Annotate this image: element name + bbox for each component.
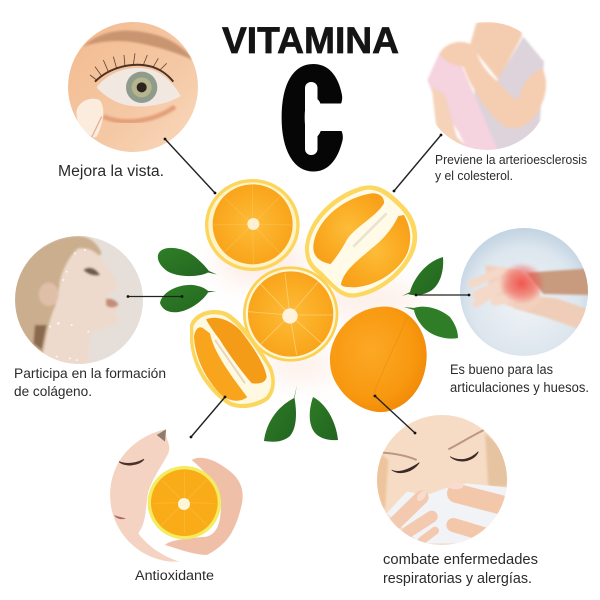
photo: shoulder pain circle: [426, 22, 548, 150]
label: arterioesclerosis: y el colesterol.: [435, 169, 513, 183]
left eyebrow: [382, 453, 417, 460]
orange half: top right: [305, 185, 417, 298]
lips: [106, 299, 118, 307]
label: articulaciones: articulaciones y huesos.: [450, 380, 589, 395]
hair wisp: [157, 429, 166, 442]
photo: antioxidant circle: [110, 429, 243, 562]
leaves group: [158, 248, 458, 442]
left arm: [431, 87, 468, 147]
label: respiratorias: combate enfermedades: [383, 552, 538, 568]
t-shirt left: [427, 52, 500, 155]
orange wedge: lower left: [190, 310, 275, 408]
orange slice: center: [243, 266, 338, 362]
connector: eye to orange: [164, 138, 216, 194]
label: arterioesclerosis: [435, 153, 587, 183]
eye: [83, 268, 100, 276]
dark hair shadow by the neck: [33, 325, 47, 350]
skin: face and neck: [40, 248, 119, 365]
leaf: bottom left: [264, 385, 297, 442]
label: articulaciones: Es bueno para las: [450, 362, 553, 377]
crossing arm and hand: [440, 42, 546, 128]
connector: antioxidant to wedge: [190, 396, 226, 438]
tissue: [387, 483, 507, 543]
label: colágeno: Participa en la formación: [14, 365, 166, 381]
eye white: [97, 68, 181, 106]
photo: eye circle: [68, 22, 198, 152]
iris: [126, 72, 157, 103]
right closed eye: [450, 452, 478, 461]
holding hand: [165, 458, 243, 555]
whole orange: [330, 307, 427, 412]
label: arterioesclerosis: Previene la arterioesclerosis: [435, 153, 587, 167]
soft shadows under the fruit: [216, 242, 423, 378]
neck and chest: [470, 22, 522, 80]
leaf: right upper: [402, 257, 443, 296]
ear: [39, 283, 59, 306]
closed eye: [119, 459, 144, 465]
hair: [13, 236, 102, 365]
label: respiratorias: respiratorias y alergías.: [383, 571, 532, 587]
oranges group: [190, 179, 427, 412]
lips: [114, 515, 126, 519]
palm: [485, 265, 542, 312]
title: big letter C: C: [285, 49, 339, 187]
front arm: [514, 296, 586, 329]
right eyebrow: [448, 430, 484, 449]
shaded sides of the face: [373, 433, 510, 510]
pupil: [137, 82, 147, 92]
connector: shoulder to orange: [393, 134, 442, 192]
orange held in hand: [148, 466, 221, 539]
fingers: [472, 270, 525, 304]
label: colágeno: [14, 365, 166, 399]
red inflammation: [499, 263, 544, 304]
title: VITAMINA: VITAMINA: [222, 20, 399, 61]
connector: nose to orange: [374, 395, 416, 434]
photo: sore hand circle: [460, 228, 588, 356]
leaf: left upper: [158, 248, 217, 276]
photo: nose tissue circle: [377, 415, 507, 545]
dotted massage lines: [49, 249, 89, 361]
t-shirt right: [473, 37, 544, 155]
under-eye crease: [103, 107, 175, 121]
label: respiratorias: [383, 552, 538, 587]
fingernails: [415, 483, 463, 503]
label: colágeno: de colágeno.: [14, 383, 92, 399]
connector: hand to leaf: [415, 294, 470, 296]
back arm: [527, 268, 590, 295]
left fingers: [397, 497, 435, 541]
finger: [76, 99, 103, 138]
label: vista: Mejora la vista.: [58, 163, 164, 180]
leaf: left lower: [160, 285, 216, 312]
right fingers: [453, 493, 502, 534]
connector: face to leaf: [127, 295, 183, 298]
face crescent: [110, 429, 180, 562]
leaf: right lower: [404, 307, 458, 339]
orange slice: top left: [205, 179, 300, 271]
label: antioxidante: Antioxidante: [135, 568, 214, 583]
eyelashes: [95, 65, 173, 82]
eyebrow: [83, 31, 193, 60]
label: articulaciones: [450, 362, 589, 395]
left closed eye: [392, 463, 419, 473]
photo: face profile circle: [15, 236, 143, 364]
leaf: bottom right: [307, 388, 338, 440]
